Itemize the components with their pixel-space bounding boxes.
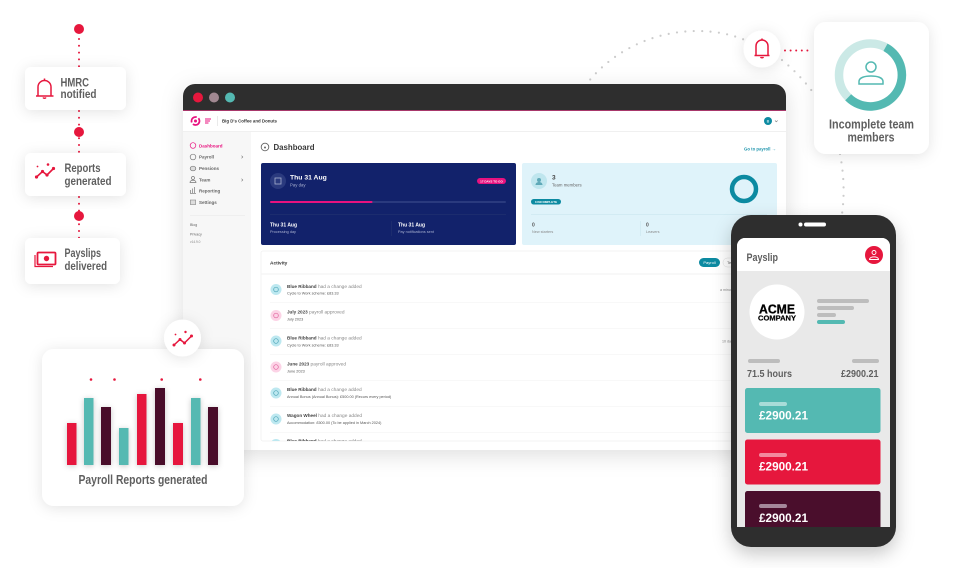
hours and total: £2900.21	[841, 368, 879, 380]
activity panel: Team	[727, 260, 737, 265]
icon badge: sparkline	[164, 320, 201, 356]
team members card: Leavers	[646, 230, 660, 234]
activity rows: Cycle to Work scheme: £83.33	[287, 292, 339, 296]
pay day card: Pay day	[290, 183, 306, 188]
sidebar: Blog	[190, 223, 197, 227]
sidebar: v14.9.0	[190, 240, 201, 244]
icon: banknotes	[35, 252, 56, 266]
team members card: Team members	[552, 183, 582, 188]
activity rows: Annual Bonus (Annual Bonus): £500.00 (Recurs every period)	[287, 395, 392, 399]
activity rows: Blue Ribband had a change added	[287, 387, 362, 393]
pay card: teal	[745, 388, 880, 433]
pay card: red: £2900.21	[759, 460, 808, 474]
pay day card: Pay notifications sent	[398, 230, 435, 234]
pay card: maroon: £2900.21	[759, 511, 808, 525]
dashboard window	[183, 84, 786, 450]
activity rows	[270, 284, 731, 441]
team members card: 0	[646, 223, 649, 229]
company logo: ACME	[759, 302, 795, 316]
phone	[731, 215, 896, 547]
pay day card: Thu 31 Aug	[398, 223, 425, 229]
pay card: maroon	[745, 491, 880, 527]
screen header	[737, 238, 890, 271]
timeline dot 3	[74, 211, 84, 221]
sidebar: Pensions	[199, 166, 220, 171]
icon: person	[859, 62, 883, 84]
activity rows: Blue Ribband had a change added	[287, 336, 362, 342]
icon badge: bell	[744, 30, 780, 68]
dotted connector: left timeline	[78, 39, 80, 238]
activity rows: July 2023	[287, 318, 303, 322]
phone speaker	[798, 222, 826, 226]
card: Reports generated: Reports	[64, 161, 101, 175]
pay day card: Thu 31 Aug	[270, 223, 297, 229]
activity rows: Cycle to Work scheme: £83.33	[287, 344, 339, 348]
card: Payslips delivered: delivered	[64, 259, 107, 273]
pay day card: 17 DAYS TO GO	[480, 179, 503, 183]
sidebar	[183, 132, 251, 450]
company detail bars	[817, 299, 869, 324]
donut chart	[839, 44, 902, 106]
card: Incomplete team members	[814, 22, 929, 154]
app top bar: Big D's Coffee and Donuts	[222, 118, 278, 124]
icon: bell	[36, 78, 54, 98]
window title bar	[183, 84, 786, 111]
red dotted connector	[785, 50, 812, 52]
pay day card	[261, 163, 516, 245]
phone screen	[737, 238, 890, 536]
dashboard heading	[261, 142, 776, 152]
team members card	[522, 163, 777, 245]
activity rows: July 2023 payroll approved	[287, 310, 345, 316]
card: HMRC notified: notified	[60, 87, 96, 101]
team members card: New starters	[532, 230, 553, 234]
hours and total: 71.5 hours	[747, 368, 792, 380]
team members card: 3 INCOMPLETE	[535, 200, 557, 204]
timeline dot 1	[74, 24, 84, 34]
hours and total	[747, 359, 879, 377]
timeline dot 2	[74, 127, 84, 137]
dashboard heading: Go to payroll →	[744, 146, 776, 152]
card: HMRC notified	[25, 67, 126, 110]
activity rows: a minute	[720, 288, 734, 292]
company logo	[750, 284, 804, 340]
pay card: red	[745, 440, 880, 484]
card: Payslips delivered: Payslips	[64, 246, 101, 260]
activity rows: June 2023 payroll approved	[287, 361, 346, 367]
card: Payroll Reports generated chart	[42, 349, 244, 506]
dotted connector: grey arc	[585, 31, 844, 214]
screen header: Payslip	[746, 252, 778, 264]
icon: sparkline	[35, 163, 55, 179]
activity rows: June 2023	[287, 369, 305, 373]
sidebar: Privacy	[190, 232, 202, 236]
pay day card: Thu 31 Aug	[290, 174, 327, 182]
activity rows: Wagon Wheel had a change added	[287, 413, 362, 419]
company logo: COMPANY	[758, 316, 796, 322]
sidebar: Dashboard	[199, 144, 223, 148]
sidebar: Team	[199, 177, 210, 182]
card: HMRC notified: HMRC	[60, 76, 89, 90]
card: Payslips delivered	[25, 238, 120, 284]
app top bar	[183, 111, 786, 132]
activity rows: Blue Ribband had a change added	[287, 438, 362, 444]
team members card: 0	[532, 223, 535, 229]
activity panel: Activity	[270, 260, 288, 266]
card: Incomplete team members: Incomplete team	[829, 118, 914, 132]
app top bar: B	[767, 118, 770, 124]
chart markers	[90, 378, 202, 381]
card: Payroll Reports generated chart: Payroll Reports generated	[78, 473, 208, 487]
activity rows: Blue Ribband had a change added	[287, 284, 362, 290]
card: Reports generated: generated	[64, 174, 112, 188]
bar chart	[67, 388, 218, 465]
card: Incomplete team members: members	[848, 130, 895, 144]
sidebar: Reporting	[199, 188, 220, 194]
activity rows: Accommodation: £500.00 (To be applied in March 2024)	[287, 421, 382, 425]
card: Reports generated	[25, 153, 126, 196]
activity rows: 10 days	[722, 340, 735, 344]
team members card: 3	[552, 174, 556, 182]
dashboard heading: Dashboard	[274, 142, 314, 152]
sidebar: Payroll	[199, 155, 214, 160]
activity panel: Payroll	[703, 260, 716, 265]
sidebar: Settings	[199, 200, 217, 205]
pay card: teal: £2900.21	[759, 408, 808, 422]
activity panel	[260, 250, 731, 442]
pay day card: Processing day	[270, 230, 296, 234]
